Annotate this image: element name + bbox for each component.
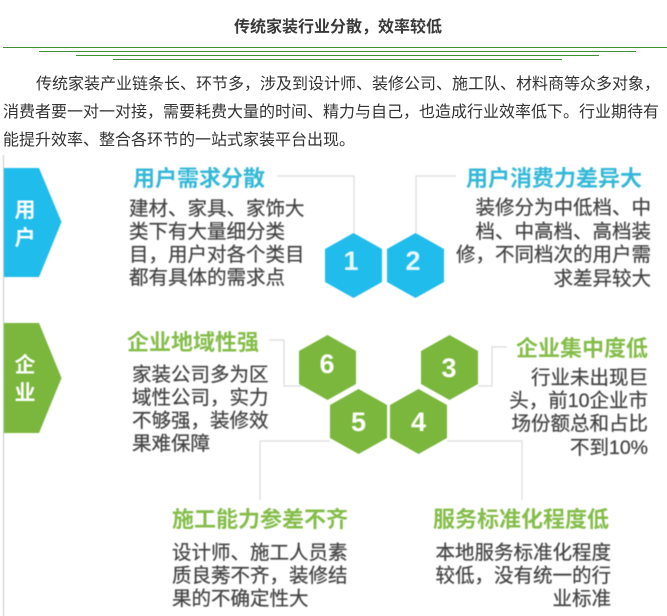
block 2: differing spending power: 装修分为中低档、中 bbox=[475, 197, 651, 219]
block 1: scattered user demand: 建材、家具、家饰大 bbox=[129, 198, 305, 220]
block 6: strong regionality: 域性公司，实力 bbox=[132, 387, 269, 409]
category tag: enterprises bbox=[4, 323, 62, 433]
hexagon 1 bbox=[325, 233, 382, 298]
block 5: uneven construction capability: 施工能力参差不齐 bbox=[172, 507, 348, 532]
block 1: scattered user demand: 目，用户对各个类目 bbox=[129, 244, 305, 266]
block 4: low service standardisation: 业标准 bbox=[552, 588, 611, 610]
block 4: low service standardisation: 较低，没有统一的行 bbox=[435, 565, 611, 587]
title underline rules bbox=[3, 47, 667, 60]
image left border bbox=[2, 155, 4, 616]
block 5: uneven construction capability: 质良莠不齐，装修结 bbox=[172, 565, 348, 587]
block 2: differing spending power: 档、中高档、高档装 bbox=[475, 221, 651, 243]
hexagon 4: 4 bbox=[411, 407, 426, 437]
block 3: low concentration: 头，前10企业市 bbox=[509, 390, 648, 412]
hexagon 6: 6 bbox=[319, 349, 335, 379]
block 1: scattered user demand: 类下有大量细分类 bbox=[129, 221, 285, 243]
block 3: low concentration: 场份额总和占比 bbox=[511, 413, 648, 435]
hexagon 1: 1 bbox=[343, 246, 359, 276]
hexagon 5 bbox=[330, 389, 387, 454]
block 3: low concentration: 不到10% bbox=[570, 437, 648, 459]
block 2: differing spending power: 求差异较大 bbox=[553, 268, 651, 290]
block 4: low service standardisation bbox=[433, 507, 611, 610]
hexagon 5: 5 bbox=[351, 407, 366, 437]
block 3: low concentration: 行业未出现巨 bbox=[531, 367, 648, 389]
category tag: users: 用 bbox=[14, 199, 36, 222]
intro paragraph bbox=[3, 75, 660, 149]
block 6: strong regionality: 企业地域性强 bbox=[127, 330, 259, 355]
connector lines bbox=[260, 176, 522, 500]
block 6: strong regionality: 家装公司多为区 bbox=[132, 364, 269, 386]
hexagon 3: 3 bbox=[441, 353, 457, 383]
block 2: differing spending power: 用户消费力差异大 bbox=[466, 166, 642, 191]
block 1: scattered user demand bbox=[129, 166, 305, 289]
block 3: low concentration: 企业集中度低 bbox=[516, 336, 648, 361]
hexagon 6 bbox=[299, 335, 356, 400]
block 5: uneven construction capability: 设计师、施工人员素 bbox=[172, 542, 348, 564]
category tag: enterprises: 业 bbox=[14, 382, 36, 405]
block 1: scattered user demand: 都有具体的需求点 bbox=[129, 267, 285, 289]
block 1: scattered user demand: 用户需求分散 bbox=[133, 166, 265, 191]
block 3: low concentration bbox=[509, 336, 648, 459]
block 6: strong regionality bbox=[127, 330, 269, 455]
block 5: uneven construction capability: 果的不确定性大 bbox=[172, 588, 309, 610]
hexagon 2: 2 bbox=[405, 246, 421, 276]
block 6: strong regionality: 果难保障 bbox=[132, 433, 210, 455]
block 2: differing spending power: 修，不同档次的用户需 bbox=[456, 244, 651, 266]
block 2: differing spending power bbox=[456, 166, 651, 290]
block 6: strong regionality: 不够强，装修效 bbox=[132, 410, 269, 432]
title: 传统家装行业分散，效率较低 bbox=[234, 19, 442, 36]
intro paragraph: 传统家装产业链条长、环节多，涉及到设计师、装修公司、施工队、材料商等众多对象， bbox=[36, 76, 660, 93]
hexagon 3 bbox=[421, 335, 478, 400]
category tag: users: 户 bbox=[14, 227, 36, 250]
block 4: low service standardisation: 服务标准化程度低 bbox=[433, 507, 609, 532]
block 5: uneven construction capability bbox=[172, 507, 348, 610]
category tag: users bbox=[4, 168, 62, 277]
category tag: enterprises: 企 bbox=[14, 353, 36, 377]
intro paragraph: 能提升效率、整合各环节的一站式家装平台出现。 bbox=[3, 132, 355, 149]
hexagon 2 bbox=[387, 233, 444, 298]
intro paragraph: 消费者要一对一对接，需要耗费大量的时间、精力与自己，也造成行业效率低下。行业期待有 bbox=[3, 104, 659, 121]
hexagon 4 bbox=[390, 389, 447, 454]
block 4: low service standardisation: 本地服务标准化程度 bbox=[435, 542, 611, 564]
